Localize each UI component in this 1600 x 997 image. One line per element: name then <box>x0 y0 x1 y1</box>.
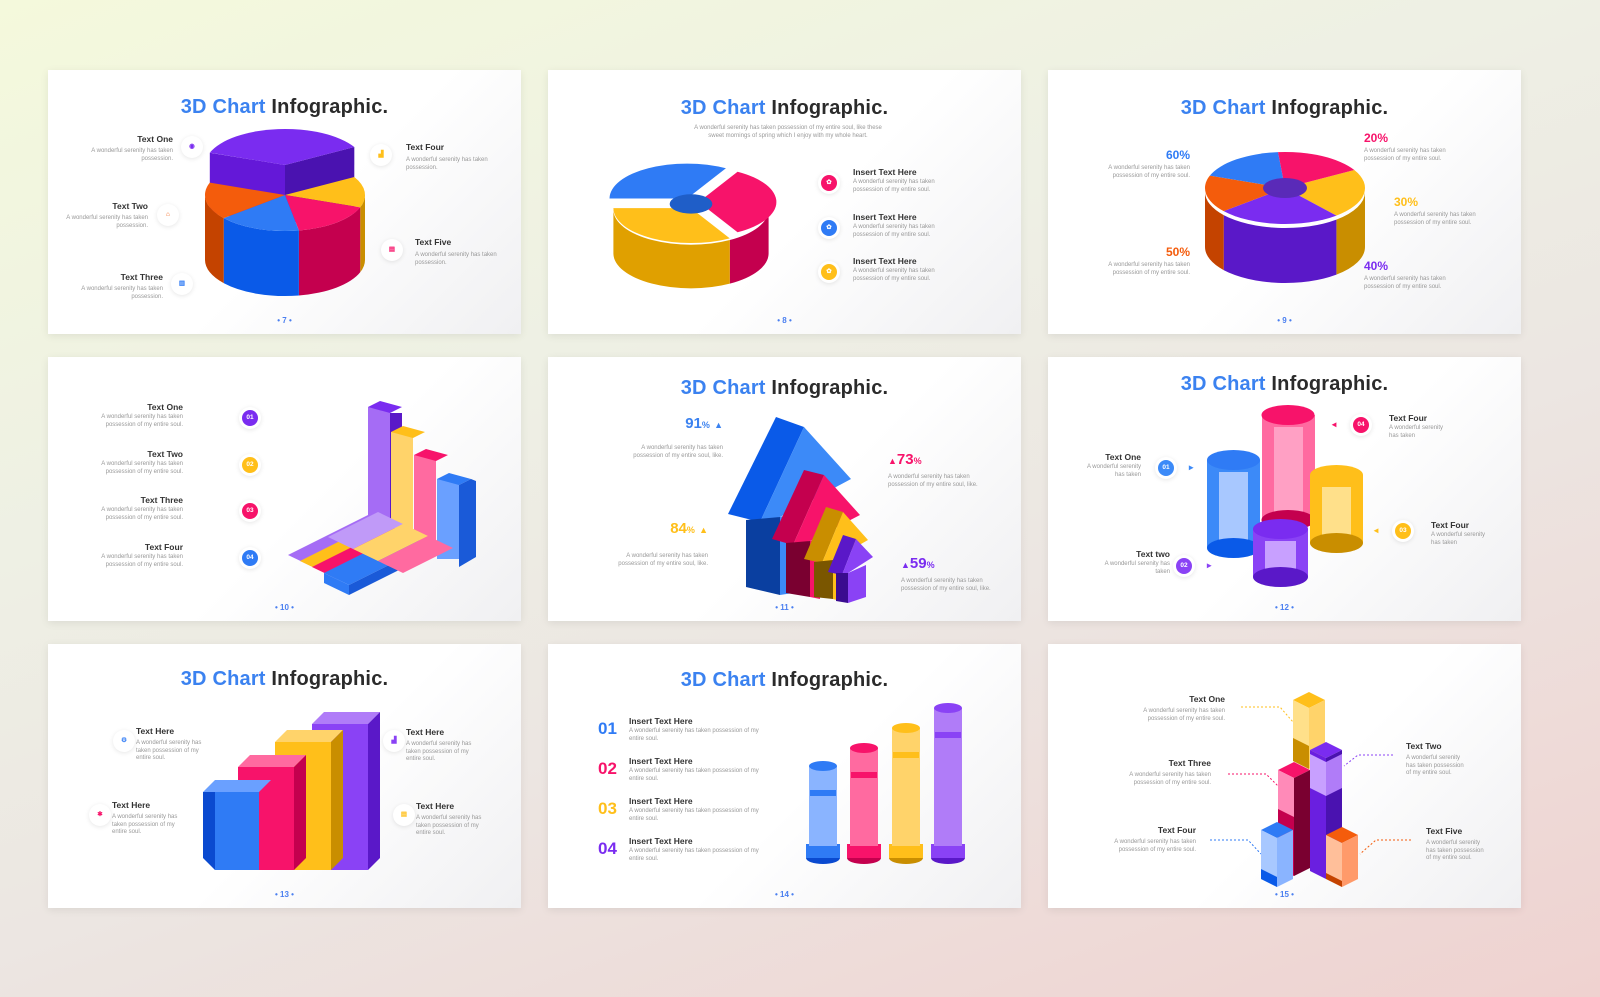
slide 8: donut 3 parts: ✿ <box>826 268 832 275</box>
label 03 <box>1374 520 1485 546</box>
slide 14: numbered list with cylinders: A wonderful serenity has taken possession of my entire soul. <box>629 728 759 742</box>
slide 9: donut 5 parts: 30% <box>1394 195 1418 209</box>
title: 3D Chart Infographic. <box>681 97 888 119</box>
stat 73% <box>888 451 978 488</box>
slide 14: numbered list with cylinders: Insert Text Here <box>629 836 693 846</box>
label: Text Two <box>66 201 148 228</box>
slide 9: donut 5 parts <box>1048 70 1521 334</box>
slide 15: stacked cubes <box>1048 644 1521 908</box>
slide 11: arrows: A wonderful serenity has taken possession of my entire soul, like. <box>888 474 978 488</box>
legend <box>818 167 935 284</box>
slide 10: staircase: Text One <box>147 402 183 412</box>
label 04 <box>1332 413 1443 438</box>
label 60% <box>1108 148 1190 178</box>
label Text Three <box>1048 643 1521 645</box>
slide 8: donut 3 parts: A wonderful serenity has taken possession of my entire soul. <box>853 268 935 282</box>
arrows chart <box>728 417 873 603</box>
slide 11: arrows <box>548 357 1021 621</box>
label 01 <box>1087 452 1194 480</box>
slide 10: staircase: 04 <box>246 554 254 561</box>
slide 15: stacked cubes: Text Four <box>1158 825 1196 835</box>
slide 12: cylinders: 03 <box>1399 527 1407 534</box>
slide 12: cylinders: 01 <box>1162 464 1170 471</box>
slide 9: donut 5 parts: 40% <box>1364 259 1388 273</box>
slide 10: staircase: A wonderful serenity has taken possession of my entire soul. <box>101 507 183 520</box>
slide 9: donut 5 parts: 20% <box>1364 131 1388 145</box>
slide 9: donut 5 parts: A wonderful serenity has taken possession of my entire soul. <box>1108 262 1190 276</box>
label: Text Four <box>406 142 488 170</box>
slide 7: 3D pie chart: ⌂ <box>166 211 170 218</box>
slide 8: donut 3 parts: Insert Text Here <box>853 256 917 266</box>
slide 14: numbered list with cylinders: 02 <box>598 759 617 778</box>
label 50% <box>1108 245 1190 276</box>
slide 10: staircase: 02 <box>246 461 254 468</box>
slide 10: staircase: Text Four <box>145 542 183 552</box>
slide 12: cylinders: ◂ <box>1374 525 1378 535</box>
slide 13: 3D bar chart: A wonderful serenity has taken possession of my entire soul. <box>112 814 177 835</box>
slide 9: donut 5 parts: A wonderful serenity has taken possession of my entire soul. <box>1364 148 1446 162</box>
slide 10: staircase: A wonderful serenity has taken possession of my entire soul. <box>101 554 183 568</box>
slide 12: cylinders: ◂ <box>1332 419 1336 429</box>
page number: • 13 • <box>275 890 294 899</box>
numbered list <box>598 716 759 862</box>
slide 15: stacked cubes: Text Three <box>1169 758 1211 768</box>
slide 10: staircase: A wonderful serenity has taken possession of my entire soul. <box>101 414 183 428</box>
title: 3D Chart Infographic. <box>181 96 388 118</box>
slide 12: cylinders: A wonderful serenity has taken <box>1087 464 1141 478</box>
slide 15: stacked cubes: A wonderful serenity has taken possession of my entire soul. <box>1114 839 1196 852</box>
slide 15: stacked cubes: A wonderful serenity has taken possession of my entire soul. <box>1426 840 1484 861</box>
label 20% <box>1364 131 1446 162</box>
slide 12: cylinders: Text One <box>1105 452 1141 462</box>
subtitle: A wonderful serenity has taken possession of my entire soul, like these sweet mornings of spring which I enjoy with my whole heart. <box>694 125 882 138</box>
slide 8: donut 3 parts: Insert Text Here <box>853 212 917 222</box>
slide 11: arrows: 84% ▲ <box>670 520 708 537</box>
slide 8: donut 3 parts: ✿ <box>826 179 832 186</box>
slide 12: cylinders: ▸ <box>1207 560 1211 570</box>
staircase chart <box>288 401 476 595</box>
stat 91% <box>633 415 723 458</box>
label 40% <box>1364 259 1446 290</box>
slide 11: arrows: A wonderful serenity has taken possession of my entire soul, like. <box>633 445 723 458</box>
slide 12: cylinders: Text Four <box>1389 413 1427 423</box>
label Text One <box>1143 694 1225 722</box>
label Text Five <box>1048 643 1521 645</box>
label: Text Five <box>415 237 497 266</box>
donut chart <box>1205 152 1365 283</box>
slide 9: donut 5 parts: 60% <box>1166 148 1190 162</box>
donut chart <box>610 164 776 288</box>
labels with number markers <box>101 402 262 570</box>
slide 8: donut 3 parts: ✿ <box>826 224 832 231</box>
slide 12: cylinders: 04 <box>1357 421 1365 428</box>
cylinder chart <box>806 703 965 864</box>
slide 14: numbered list with cylinders: A wonderful serenity has taken possession of my entire soul. <box>629 768 759 782</box>
slide 15: stacked cubes: Text Five <box>1426 826 1462 836</box>
slide 12: cylinders: Text Four <box>1431 520 1469 530</box>
slide 12: cylinders: Text two <box>1136 549 1170 559</box>
slide 8: donut 3 parts: A wonderful serenity has taken possession of my entire soul. <box>853 224 935 238</box>
title: 3D Chart Infographic. <box>681 377 888 399</box>
slide 7: 3D pie chart: A wonderful serenity has taken possession. <box>415 252 497 266</box>
slide 12: cylinders: ▸ <box>1189 462 1193 472</box>
slide 12: cylinders: A wonderful serenity has taken <box>1389 425 1443 438</box>
slide 10: staircase: 01 <box>246 414 254 421</box>
slide 7: 3D pie chart: A wonderful serenity has taken possession. <box>406 157 488 170</box>
slide 13: 3D bar chart: Text Here <box>416 801 454 811</box>
cylinders chart <box>1207 405 1363 587</box>
slide 14: numbered list with cylinders: Insert Text Here <box>629 756 693 766</box>
slide 10: staircase: 03 <box>246 507 254 514</box>
slide 13: 3D bar chart: ▤ <box>401 811 407 818</box>
slide 13: 3D bar chart <box>48 644 521 908</box>
slide 10: staircase <box>48 357 521 621</box>
slide 7: 3D pie chart: Text Five <box>415 237 451 247</box>
label Text Four <box>1048 643 1521 645</box>
slide 11: arrows: ▲59% <box>901 555 935 572</box>
slide 7: 3D pie chart: ▟ <box>378 151 384 158</box>
slide 13: 3D bar chart: Text Here <box>406 727 444 737</box>
label: Text One <box>91 134 173 162</box>
slide 9: donut 5 parts: A wonderful serenity has taken possession of my entire soul. <box>1394 212 1476 226</box>
slide 15: stacked cubes: A wonderful serenity has taken possession of my entire soul. <box>1143 708 1225 722</box>
slide 10: staircase: A wonderful serenity has taken possession of my entire soul. <box>101 461 183 474</box>
slide 11: arrows: A wonderful serenity has taken possession of my entire soul, like. <box>901 578 991 592</box>
labels <box>88 726 482 836</box>
title: 3D Chart Infographic. <box>681 669 888 691</box>
slide 8: donut 3 parts: Insert Text Here <box>853 167 917 177</box>
slide 9: donut 5 parts: 50% <box>1166 245 1190 259</box>
slide 10: staircase: Text Two <box>147 449 183 459</box>
slide 15: stacked cubes: Text One <box>1189 694 1225 704</box>
slide 13: 3D bar chart: ⚙ <box>121 737 127 744</box>
slide 8: donut 3 parts <box>548 70 1021 334</box>
title: 3D Chart Infographic. <box>1181 373 1388 395</box>
page number: • 10 • <box>275 603 294 612</box>
slide 15: stacked cubes: A wonderful serenity has taken possession of my entire soul. <box>1129 772 1211 786</box>
page number: • 9 • <box>1277 316 1292 325</box>
title: 3D Chart Infographic. <box>181 668 388 690</box>
slide 14: numbered list with cylinders: Insert Text Here <box>629 796 693 806</box>
title: 3D Chart Infographic. <box>1181 97 1388 119</box>
slide 13: 3D bar chart: A wonderful serenity has taken possession of my entire soul. <box>136 740 201 761</box>
slide 7: 3D pie chart: Text One <box>137 134 173 144</box>
page number: • 8 • <box>777 316 792 325</box>
slide 9: donut 5 parts: A wonderful serenity has taken possession of my entire soul. <box>1108 165 1190 178</box>
slide 12: cylinders: A wonderful serenity has taken <box>1105 561 1170 574</box>
slide 7: 3D pie chart: A wonderful serenity has taken possession. <box>81 286 163 300</box>
slide 14: numbered list with cylinders: 01 <box>598 719 617 738</box>
slide 14: numbered list with cylinders: 04 <box>598 839 617 858</box>
bar chart <box>203 712 380 870</box>
slide 15: stacked cubes: Text Two <box>1406 741 1442 751</box>
slide 13: 3D bar chart: Text Here <box>112 800 150 810</box>
stat 59% <box>901 555 991 592</box>
cube columns chart <box>1210 692 1411 887</box>
slide 7: 3D pie chart: ◉ <box>189 143 195 150</box>
slide 12: cylinders: A wonderful serenity has taken <box>1431 532 1485 546</box>
slide 12: cylinders <box>1048 357 1521 621</box>
page number: • 7 • <box>277 316 292 325</box>
label 02 <box>1104 549 1212 578</box>
slide 14: numbered list with cylinders <box>548 644 1021 908</box>
slide 15: stacked cubes: A wonderful serenity has taken possession of my entire soul. <box>1406 755 1464 776</box>
page number: • 14 • <box>775 890 794 899</box>
slide 13: 3D bar chart: A wonderful serenity has taken possession of my entire soul. <box>416 815 481 836</box>
slide 7: 3D pie chart: Text Two <box>112 201 148 211</box>
slide 7: 3D pie chart: A wonderful serenity has taken possession. <box>91 148 173 162</box>
page number: • 15 • <box>1275 890 1294 899</box>
page number: • 11 • <box>775 603 794 612</box>
slide 13: 3D bar chart: ▟ <box>392 737 396 744</box>
slide 7: 3D pie chart: A wonderful serenity has taken possession. <box>66 215 148 228</box>
slide 13: 3D bar chart: ✱ <box>97 811 103 818</box>
slide 14: numbered list with cylinders: A wonderful serenity has taken possession of my entire soul. <box>629 808 759 822</box>
page number: • 12 • <box>1275 603 1294 612</box>
slide 14: numbered list with cylinders: A wonderful serenity has taken possession of my entire soul. <box>629 848 759 862</box>
slide 11: arrows: A wonderful serenity has taken possession of my entire soul, like. <box>618 553 708 566</box>
slide 9: donut 5 parts: A wonderful serenity has taken possession of my entire soul. <box>1364 276 1446 290</box>
slide 11: arrows: ▲73% <box>888 451 922 468</box>
slide 11: arrows: 91% ▲ <box>685 415 723 432</box>
slide 7: 3D pie chart: ▤ <box>389 246 395 253</box>
slide 12: cylinders: 02 <box>1180 562 1188 569</box>
icons <box>156 143 404 296</box>
slide 14: numbered list with cylinders: Insert Text Here <box>629 716 693 726</box>
slide 8: donut 3 parts: A wonderful serenity has taken possession of my entire soul. <box>853 179 935 192</box>
label 30% <box>1394 195 1476 226</box>
label Text Two <box>1048 643 1521 645</box>
slide 7: 3D pie chart: Text Four <box>406 142 444 152</box>
slide 13: 3D bar chart: A wonderful serenity has taken possession of my entire soul. <box>406 741 471 762</box>
slide 7: 3D pie chart <box>48 70 521 334</box>
slide 10: staircase: Text Three <box>141 495 183 505</box>
pie chart <box>205 129 365 296</box>
slide 13: 3D bar chart: Text Here <box>136 726 174 736</box>
slide 14: numbered list with cylinders: 03 <box>598 799 617 818</box>
slide 7: 3D pie chart: Text Three <box>121 272 163 282</box>
label: Text Three <box>81 272 163 300</box>
stat 84% <box>618 520 708 566</box>
slide 7: 3D pie chart: ▥ <box>179 280 185 287</box>
